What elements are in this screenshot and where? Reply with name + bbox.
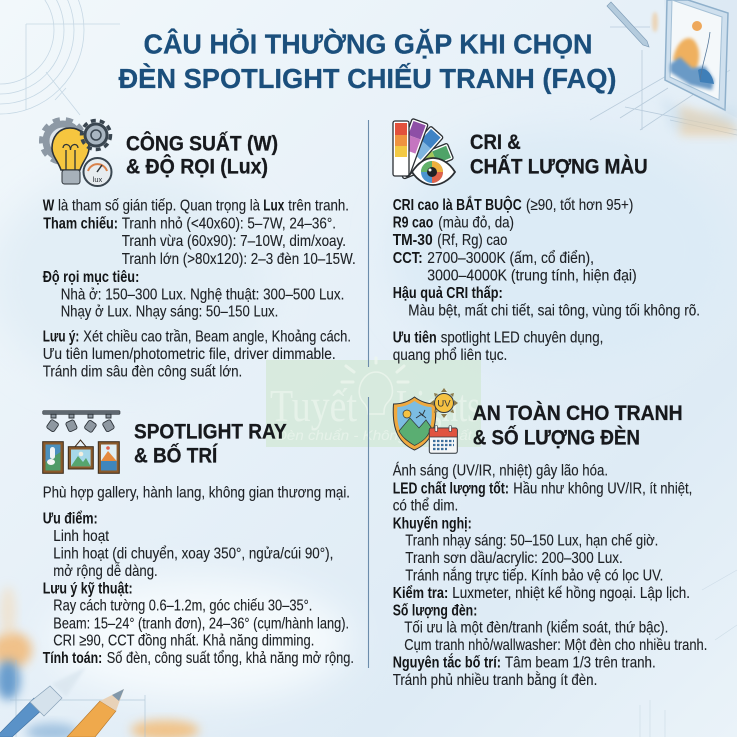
heading (473, 400, 683, 449)
body text: Kiểm tra: (393, 584, 448, 602)
panel: CRI và chất lượng màu (393, 118, 700, 364)
body text: Độ rọi mục tiêu: (43, 269, 139, 286)
body text (43, 198, 356, 380)
title: ĐÈN SPOTLIGHT CHIẾU TRANH (FAQ) (118, 63, 616, 94)
icon: track lights and framed pictures (43, 411, 120, 473)
sketch lines right and bottom right (640, 570, 737, 737)
icon: shield with sun and calendar: UV (437, 398, 451, 410)
body text (393, 461, 707, 689)
body text: (≥90, tốt hơn 95+) (526, 197, 633, 214)
body text: Số đèn, công suất tổng, khả năng mở rộng. (107, 649, 354, 667)
body text: Hầu như không UV/IR, ít nhiệt, (513, 480, 692, 497)
body text: Tranh vừa (60x90): 7–10W, dim/xoay. (122, 233, 346, 250)
body text: Nhạy ở Lux. Nhạy sáng: 50–150 Lux. (61, 304, 278, 321)
body text: 2700–3000K (ấm, cổ điển), (427, 249, 594, 267)
body text: Ưu điểm: (43, 510, 98, 528)
body text: Số lượng đèn: (393, 602, 477, 619)
heading: CÔNG SUẤT (W) (126, 131, 278, 156)
heading: CRI & (470, 130, 521, 154)
body text: Ray cách tường 0.6–1.2m, góc chiếu 30–35°. (53, 598, 312, 615)
body text: (màu đỏ, da) (438, 215, 514, 232)
body text: Linh hoạt (di chuyển, xoay 350°, ngửa/cúi 90°), (53, 544, 333, 562)
body text (43, 484, 354, 667)
body text: có thể dim. (393, 497, 458, 515)
body text: Tránh phủ nhiều tranh bằng ít đèn. (393, 670, 597, 689)
body text: Khuyến nghị: (393, 515, 472, 532)
watermark (266, 358, 481, 447)
title: CÂU HỎI THƯỜNG GẶP KHI CHỌN (144, 28, 592, 60)
body text: CRI cao là BẮT BUỘC (393, 195, 522, 214)
heading: & ĐỘ RỌI (Lux) (126, 153, 268, 178)
body text: trên tranh. (288, 198, 349, 214)
body text: Lux (263, 198, 284, 214)
icon: bulb with gears and lux gauge: lux (93, 175, 103, 184)
body text: Beam: 15–24° (tranh đơn), 24–36° (cụm/hành lang). (53, 615, 349, 632)
vertical divider (368, 120, 370, 668)
body text: Tranh lớn (>80x120): 2–3 đèn 10–15W. (122, 251, 356, 268)
heading: & BỐ TRÍ (134, 442, 218, 468)
body text: CRI ≥90, CCT đồng nhất. Khả năng dimming. (53, 633, 314, 650)
body text: spotlight LED chuyên dụng, (441, 329, 603, 346)
body text: Tránh nắng trực tiếp. Kính bảo vệ có lọc UV. (405, 565, 663, 584)
body text: Lưu ý kỹ thuật: (43, 580, 133, 597)
body text: Nhà ở: 150–300 Lux. Nghệ thuật: 300–500 Lux. (61, 286, 344, 303)
body text: R9 cao (393, 215, 433, 232)
body text: Ưu tiên lumen/photometric file, driver dimmable. (43, 346, 336, 363)
heading: SPOTLIGHT RAY (134, 420, 287, 444)
body text: là tham số gián tiếp. Quan trọng là (58, 198, 260, 214)
title (118, 28, 616, 94)
heading: AN TOÀN CHO TRANH (473, 400, 683, 425)
body text: Linh hoạt (53, 528, 109, 545)
body text: 3000–4000K (trung tính, hiện đại) (427, 268, 637, 285)
body text: Tranh nhỏ (<40x60): 5–7W, 24–36°. (122, 216, 336, 232)
icon: bulb with gears and lux gauge (42, 120, 112, 186)
body text: Hậu quả CRI thấp: (393, 285, 503, 302)
body text: mở rộng dễ dàng. (53, 561, 158, 580)
watermark: Đèn chuẩn - Không gian chất (276, 427, 473, 443)
body text: LED chất lượng tốt: (393, 480, 509, 497)
icon: colour fan deck with eye (393, 118, 455, 185)
brush and pencil bottom left (0, 586, 199, 737)
heading: CHẤT LƯỢNG MÀU (470, 153, 648, 178)
body text (393, 195, 700, 364)
body text: Tối ưu là một đèn/tranh (kiểm soát, thứ bậc). (404, 619, 668, 637)
body text: (Rf, Rg) cao (437, 232, 507, 249)
heading (470, 130, 648, 178)
picture right (98, 442, 119, 473)
body text: Tâm beam 1/3 trên tranh. (505, 655, 656, 672)
body text: Ánh sáng (UV/IR, nhiệt) gây lão hóa. (393, 461, 608, 480)
body text: CCT: (393, 250, 423, 267)
body text: quang phổ liên tục. (393, 346, 507, 364)
picture left (43, 442, 63, 473)
body text: Xét chiều cao trần, Beam angle, Khoảng cách. (83, 329, 351, 346)
body text: Nguyên tắc bố trí: (393, 653, 501, 672)
body text: Tính toán: (43, 650, 102, 667)
panel: an toàn cho tranh và số lượng đèn (393, 388, 707, 689)
panel: spotlight ray và bố trí (43, 411, 354, 667)
picture middle (68, 440, 93, 469)
body text: Ưu tiên (393, 329, 437, 346)
heading (126, 131, 278, 178)
body text: Tránh dim sâu đèn công suất lớn. (43, 363, 242, 380)
body text: TM-30 (393, 232, 433, 249)
body text: Tranh nhạy sáng: 50–150 Lux, hạn chế giờ. (405, 533, 658, 550)
body text: Luxmeter, nhiệt kế hồng ngoại. Lập lịch. (452, 585, 690, 602)
body text: Tham chiếu: (43, 216, 118, 232)
watermark: Tuyết (270, 381, 357, 431)
painting and pencil top right (590, 0, 737, 135)
body text: W (43, 198, 55, 214)
heading (134, 420, 287, 468)
heading: & SỐ LƯỢNG ĐÈN (473, 423, 640, 449)
panel: công suất và độ rọi (42, 120, 356, 380)
body text: Lưu ý: (43, 329, 79, 346)
sketch lines top left (0, 0, 120, 115)
icon: shield with sun and calendar (393, 388, 458, 453)
body text: Phù hợp gallery, hành lang, không gian thương mại. (43, 484, 350, 501)
watermark: Lights (396, 381, 480, 431)
body text: Tranh sơn dầu/acrylic: 200–300 Lux. (405, 550, 623, 567)
